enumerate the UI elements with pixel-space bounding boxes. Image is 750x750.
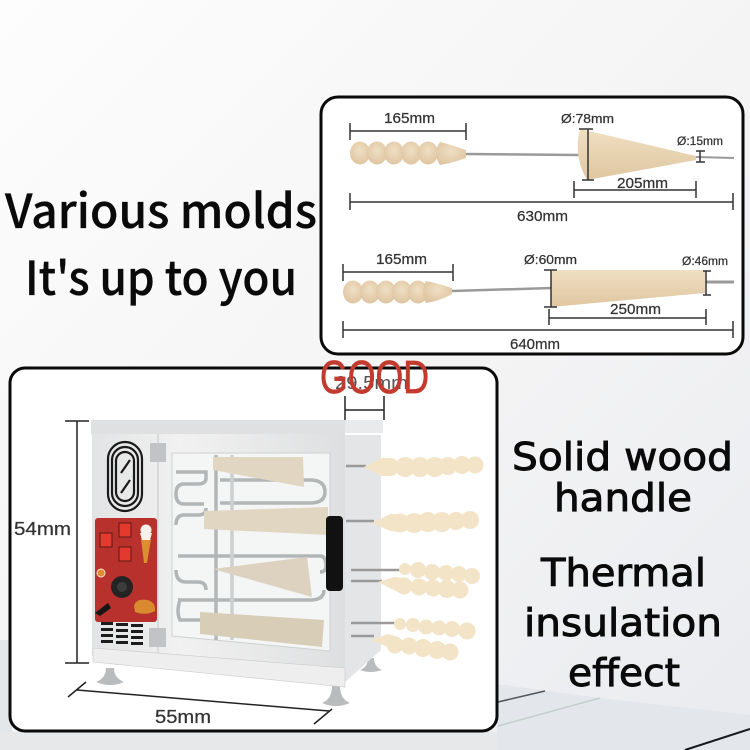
glass window — [172, 453, 330, 651]
dimension labels: molds: 165mm — [384, 110, 435, 127]
dimension labels: molds: Ø:60mm — [524, 252, 577, 267]
watermark text: GOOD: GOOD — [320, 351, 429, 403]
dimension lines: molds — [343, 123, 733, 338]
heading: thermal insulation effect — [524, 551, 722, 695]
dimension labels: molds — [376, 110, 728, 353]
dimension labels: molds: Ø:78mm — [561, 111, 614, 126]
door seam — [157, 434, 159, 653]
mold 3 in window — [213, 557, 312, 597]
machine front body — [92, 434, 345, 686]
mold 4 in window — [200, 612, 324, 647]
heading: various molds — [4, 173, 317, 309]
dimension labels: machine: 55mm — [155, 707, 211, 727]
dimension lines: machine — [65, 396, 384, 724]
machine base — [93, 648, 345, 687]
heading: thermal insulation effect: insulation — [524, 601, 722, 645]
red control panel — [95, 518, 157, 622]
dimension labels: molds: 165mm — [376, 251, 427, 268]
dimension labels: molds: 640mm — [510, 336, 560, 353]
dimension labels: machine: 29.5mm — [335, 373, 408, 393]
machine illustration — [91, 420, 484, 706]
heating coils — [176, 455, 326, 640]
heading: various molds: It's up to you — [25, 240, 297, 309]
straight tapered mold with handle — [343, 270, 734, 307]
heading: solid wood handle: Solid wood — [512, 435, 733, 479]
dimension labels: molds: 205mm — [617, 175, 668, 192]
dimension labels: molds: Ø:46mm — [682, 254, 728, 268]
dimension labels: molds: 630mm — [517, 208, 568, 225]
machine feet — [96, 658, 382, 706]
hinges — [149, 443, 166, 647]
fan vent — [108, 442, 142, 511]
heading: various molds: Various molds — [4, 173, 317, 242]
dimension labels: machine: 54mm — [14, 519, 71, 539]
heading: solid wood handle — [512, 435, 733, 520]
dimension labels: molds: Ø:15mm — [677, 134, 723, 148]
mold 1 in window — [213, 457, 304, 487]
heading: thermal insulation effect: effect — [568, 651, 680, 695]
mold 2 in window — [204, 507, 328, 535]
machine top — [91, 420, 383, 434]
bottom vents — [101, 622, 143, 645]
heading: solid wood handle: handle — [554, 476, 692, 520]
dimension labels: machine — [14, 373, 408, 727]
cone mold with handle — [350, 129, 734, 180]
panel: machine — [10, 368, 497, 731]
dimension labels: molds: 250mm — [610, 301, 661, 318]
door handle — [326, 516, 343, 591]
machine right side — [345, 435, 381, 682]
panel: mold dimensions — [321, 97, 743, 354]
wooden handles — [346, 456, 484, 660]
heading: thermal insulation effect: Thermal — [540, 551, 706, 595]
